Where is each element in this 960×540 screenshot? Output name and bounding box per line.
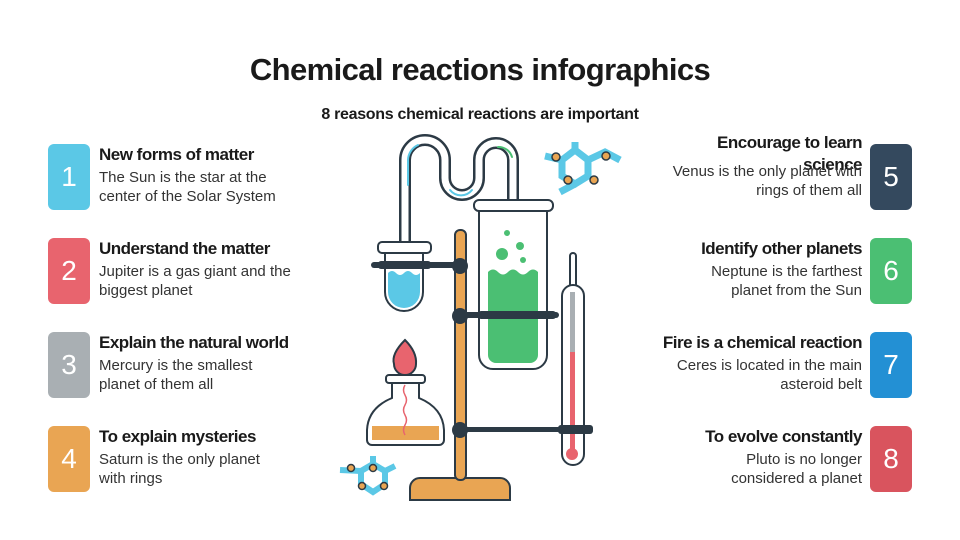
stand base xyxy=(410,478,510,500)
text 8: Pluto is no longer xyxy=(746,451,862,468)
text 5: science xyxy=(803,155,862,174)
item 7 xyxy=(663,332,912,398)
text 7: Ceres is located in the main asteroid belt xyxy=(677,357,862,393)
text 2: Understand the matter xyxy=(99,239,270,258)
text 4: Saturn is the only planet xyxy=(99,451,260,468)
text 1 xyxy=(99,145,276,205)
text 2 xyxy=(99,239,291,299)
text 8 xyxy=(705,427,862,487)
small flask xyxy=(378,242,431,311)
text 6 xyxy=(701,239,862,299)
text 5: Venus is the only planet with rings of them all xyxy=(673,163,862,199)
text 6: Neptune is the farthest xyxy=(711,263,862,280)
text 5: Encourage to learn xyxy=(717,133,862,152)
number badge 3: 3 xyxy=(61,349,77,380)
thermometer xyxy=(562,253,584,465)
text 8: To evolve constantly xyxy=(705,427,862,446)
text 7 xyxy=(663,333,862,393)
number badge 4: 4 xyxy=(61,443,77,474)
text 1: The Sun is the star at the center of the Solar System xyxy=(99,169,276,205)
stand rod xyxy=(455,230,466,480)
text 3: Mercury is the smallest planet of them all xyxy=(99,357,252,393)
number badge 8 xyxy=(870,426,912,492)
item 2 xyxy=(48,238,291,304)
number badge 6 xyxy=(870,238,912,304)
glass tube xyxy=(405,140,513,248)
item 6 xyxy=(701,238,912,304)
text 4 xyxy=(99,427,260,487)
big test tube xyxy=(474,200,553,369)
item 4 xyxy=(48,426,260,492)
number badge 4 xyxy=(48,426,90,492)
number badge 2: 2 xyxy=(61,255,77,286)
number badge 1 xyxy=(48,144,90,210)
text 6: planet from the Sun xyxy=(731,282,862,299)
burner xyxy=(367,340,444,445)
clamps xyxy=(371,258,593,438)
item 3 xyxy=(48,332,289,398)
number badge 6: 6 xyxy=(883,255,899,286)
number badge 5: 5 xyxy=(883,161,899,192)
item 1 xyxy=(48,144,276,210)
title: Chemical reactions infographics xyxy=(250,52,710,87)
text 7: Fire is a chemical reaction xyxy=(663,333,862,352)
item 8 xyxy=(705,426,912,492)
text 4: To explain mysteries xyxy=(99,427,256,446)
number badge 7: 7 xyxy=(883,349,899,380)
text 2: Jupiter is a gas giant and the biggest planet xyxy=(99,263,291,299)
number badge 7 xyxy=(870,332,912,398)
subtitle: 8 reasons chemical reactions are important xyxy=(321,106,639,123)
text 6: Identify other planets xyxy=(701,239,862,258)
text 3 xyxy=(99,333,289,393)
text 5 xyxy=(672,133,862,199)
molecule bottom left xyxy=(340,456,395,492)
text 1: New forms of matter xyxy=(99,145,254,164)
number badge 5 xyxy=(870,144,912,210)
number badge 3 xyxy=(48,332,90,398)
molecule top right xyxy=(545,142,620,192)
number badge 8: 8 xyxy=(883,443,899,474)
number badge 2 xyxy=(48,238,90,304)
text 4: with rings xyxy=(99,470,162,487)
item 5 xyxy=(672,133,912,210)
number badge 1: 1 xyxy=(61,161,77,192)
text 3: Explain the natural world xyxy=(99,333,289,352)
text 8: considered a planet xyxy=(731,470,862,487)
